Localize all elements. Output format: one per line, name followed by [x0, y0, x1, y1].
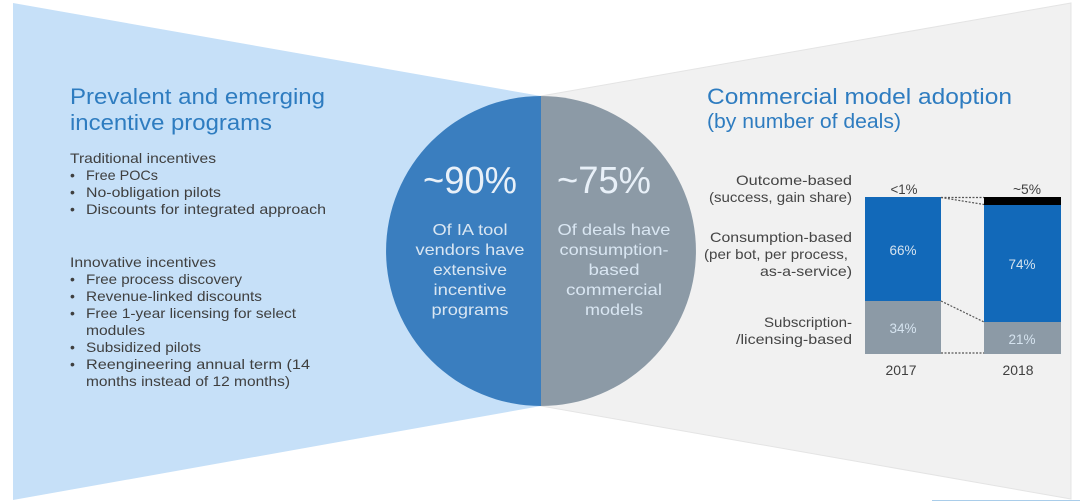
text: vendors description: vendors have: [416, 242, 525, 259]
bottom edge accent line: [932, 500, 1080, 501]
labels: commercial model categories: /licensing-based: [736, 331, 852, 347]
text block: traditional incentives: [70, 150, 326, 217]
stat: ~90%: ~90%: [423, 160, 517, 202]
heading: prevalent and emerging incentive programs: incentive programs: [70, 110, 272, 135]
bar: 2018: [984, 181, 1061, 378]
labels: commercial model categories: (per bot, per process,: [704, 246, 848, 262]
text block: traditional incentives: •: [70, 184, 75, 200]
text: vendors description: programs: [432, 302, 508, 319]
panel: right commercial model background: [541, 3, 1071, 499]
text: deals description: based: [588, 262, 640, 279]
text block: innovative incentives: Subsidized pilots: [86, 339, 201, 355]
bar: 2018: 74%: [1008, 257, 1036, 272]
heading: prevalent and emerging incentive programs: Prevalent and emerging: [70, 84, 325, 109]
text: deals description: [558, 222, 671, 319]
labels: commercial model categories: Outcome-based: [736, 172, 852, 188]
labels: commercial model categories: Subscription-: [764, 314, 852, 330]
text block: traditional incentives: •: [70, 201, 75, 217]
text block: traditional incentives: No-obligation pilots: [86, 184, 221, 200]
text block: traditional incentives: •: [70, 167, 75, 183]
text: vendors description: [416, 222, 525, 319]
bar: 2018: 21%: [1008, 332, 1036, 347]
text block: innovative incentives: Innovative incentives: [70, 254, 216, 270]
text: deals description: models: [585, 302, 643, 319]
circle: right half deals with consumption models: [541, 96, 696, 406]
labels: commercial model categories: (success, gain share): [709, 189, 852, 205]
heading: commercial model adoption: (by number of deals): [707, 111, 901, 133]
bar: 2017: 34%: [890, 321, 916, 336]
labels: commercial model categories: as-a-service): [760, 263, 852, 279]
text block: innovative incentives: Free process discovery: [86, 271, 242, 287]
heading: commercial model adoption: Commercial model adoption: [707, 84, 1012, 109]
circle: left half vendors with incentive programs: [386, 96, 541, 406]
text block: innovative incentives: Free 1-year licensing for select: [86, 305, 296, 321]
text block: innovative incentives: Reengineering annual term (14: [86, 356, 310, 372]
text block: innovative incentives: [70, 254, 310, 389]
bar: 2018: ~5%: [1013, 181, 1041, 197]
stacked bar chart: [865, 181, 1061, 378]
bar: 2017: <1%: [890, 181, 918, 197]
text block: innovative incentives: •: [70, 305, 75, 321]
bar: 2017: 2017: [886, 362, 917, 378]
text: vendors description: incentive: [434, 282, 507, 299]
text block: innovative incentives: •: [70, 356, 75, 372]
text block: traditional incentives: Free POCs: [86, 167, 158, 183]
bar: 2017: [865, 181, 941, 378]
labels: commercial model categories: [704, 172, 852, 347]
bar: 2018: 2018: [1002, 362, 1034, 378]
text block: innovative incentives: •: [70, 339, 75, 355]
text: deals description: commercial: [566, 282, 662, 299]
stat: ~75%: ~75%: [557, 160, 651, 202]
text block: traditional incentives: Traditional incentives: [70, 150, 216, 166]
text block: innovative incentives: months instead of 12 months): [86, 373, 290, 389]
connector lines between bars: [941, 198, 984, 353]
bar: 2017: 66%: [890, 243, 916, 258]
text block: innovative incentives: modules: [86, 322, 145, 338]
text block: innovative incentives: •: [70, 271, 75, 287]
panel: left incentive programs background: [13, 3, 541, 500]
text: vendors description: Of IA tool: [432, 222, 508, 239]
text: vendors description: extensive: [433, 262, 507, 279]
text block: innovative incentives: Revenue-linked discounts: [86, 288, 262, 304]
text: deals description: Of deals have: [558, 222, 671, 239]
text block: traditional incentives: Discounts for integrated approach: [86, 201, 326, 217]
labels: commercial model categories: Consumption-based: [710, 229, 852, 245]
text block: innovative incentives: •: [70, 288, 75, 304]
heading: commercial model adoption: [707, 84, 1012, 133]
text: deals description: consumption-: [560, 242, 668, 259]
heading: prevalent and emerging incentive programs: [70, 84, 325, 135]
